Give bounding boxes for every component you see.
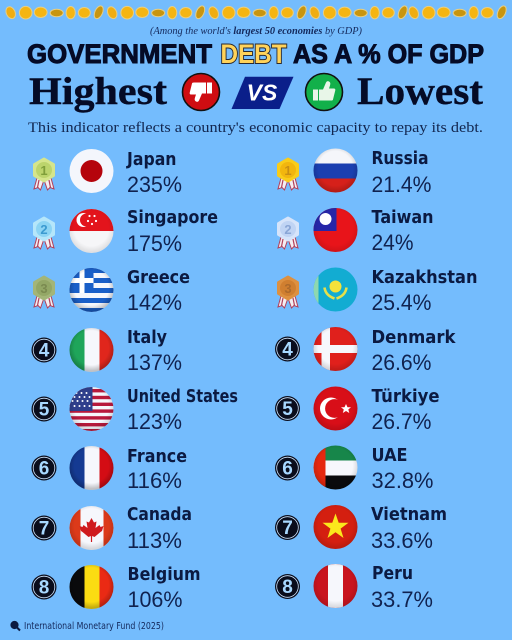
row: United States: United States: [127, 387, 238, 407]
row: Peru: 8: [282, 577, 293, 598]
row: Canada: 113%: [127, 528, 182, 553]
row: Denmark: Denmark: [372, 328, 456, 348]
row: Vietnam: 33.6%: [371, 528, 433, 553]
row: Türkiye: 26.7%: [372, 409, 432, 434]
icon: thumbs down: [182, 74, 220, 110]
row: Belgium: 106%: [128, 587, 182, 612]
row: UAE: 32.8%: [372, 468, 434, 493]
icon: VS badge: [232, 77, 294, 109]
coin strip: [4, 5, 508, 20]
row: Singapore: 175%: [127, 231, 182, 256]
panel: highest debt list: [32, 149, 238, 612]
row: Türkiye: 5: [282, 399, 293, 420]
icon: thumbs up: [306, 74, 342, 110]
row: Vietnam: Vietnam: [371, 505, 447, 525]
row: Singapore: Singapore: [127, 208, 218, 228]
row: United States: [32, 387, 238, 434]
row: Canada: [32, 505, 192, 553]
row: Denmark: [275, 327, 456, 375]
row: Belgium: [32, 565, 200, 612]
row: Singapore: [34, 208, 218, 256]
row: Russia: 1: [284, 163, 292, 178]
row: UAE: 6: [282, 458, 293, 480]
heading: Lowest: Lowest: [357, 70, 483, 113]
row: Greece: [34, 268, 190, 315]
row: Greece: 142%: [127, 290, 182, 315]
icon: magnifier: [11, 621, 20, 630]
row: Japan: 1: [40, 163, 48, 178]
row: Kazakhstan: 25.4%: [372, 290, 432, 315]
row: Taiwan: 2: [284, 222, 292, 237]
panel: lowest debt list: [275, 148, 478, 612]
row: Greece: Greece: [127, 268, 190, 288]
row: Vietnam: 7: [282, 518, 293, 539]
row: United States: 123%: [127, 409, 182, 434]
row: Canada: Canada: [127, 505, 192, 525]
row: Italy: Italy: [127, 328, 168, 348]
row: Russia: Russia: [372, 149, 428, 169]
row: Italy: 137%: [127, 350, 182, 375]
title: AS A % OF GDP: [293, 39, 484, 69]
row: Italy: 4: [39, 340, 50, 362]
row: Türkiye: [275, 386, 440, 434]
row: Japan: Japan: [126, 150, 176, 170]
row: Singapore: 2: [40, 222, 48, 237]
title: [27, 39, 484, 69]
row: United States: 5: [39, 400, 50, 420]
row: Peru: [275, 564, 433, 612]
row: Taiwan: [278, 208, 434, 255]
row: Belgium: Belgium: [128, 565, 200, 585]
row: Kazakhstan: [278, 268, 478, 315]
row: Peru: Peru: [372, 564, 413, 584]
row: Denmark: 4: [282, 340, 293, 360]
row: Peru: 33.7%: [371, 587, 433, 612]
row: Kazakhstan: Kazakhstan: [372, 268, 478, 288]
row: Japan: [34, 149, 182, 197]
row: Russia: [278, 148, 432, 197]
heading: Highest: Highest: [29, 70, 167, 113]
row: France: 6: [39, 458, 49, 480]
row: Japan: 235%: [127, 172, 182, 197]
icon: VS badge: VS: [247, 80, 278, 106]
row: Greece: 3: [40, 281, 48, 296]
title: GOVERNMENT: [27, 39, 212, 69]
title: DEBT: [220, 39, 286, 69]
row: France: [32, 446, 187, 493]
row: France: 116%: [127, 468, 182, 493]
row: Belgium: 8: [39, 578, 49, 598]
row: Vietnam: [275, 505, 447, 553]
row: Türkiye: Türkiye: [372, 387, 440, 407]
row: Taiwan: 24%: [372, 230, 414, 255]
row: Canada: 7: [39, 518, 49, 540]
description: This indicator reflects a country's economic capacity to repay its debt.: [28, 120, 483, 136]
source: International Monetary Fund (2025): [24, 621, 164, 632]
row: UAE: UAE: [372, 446, 408, 466]
row: Russia: 21.4%: [372, 172, 432, 197]
row: France: France: [127, 447, 187, 467]
subheading note: (Among the world's largest 50 economies by GDP): [150, 26, 363, 37]
row: Denmark: 26.6%: [372, 350, 432, 375]
row: Kazakhstan: 3: [284, 281, 292, 296]
row: Italy: [32, 328, 182, 375]
row: UAE: [275, 446, 434, 493]
row: Taiwan: Taiwan: [372, 208, 434, 228]
